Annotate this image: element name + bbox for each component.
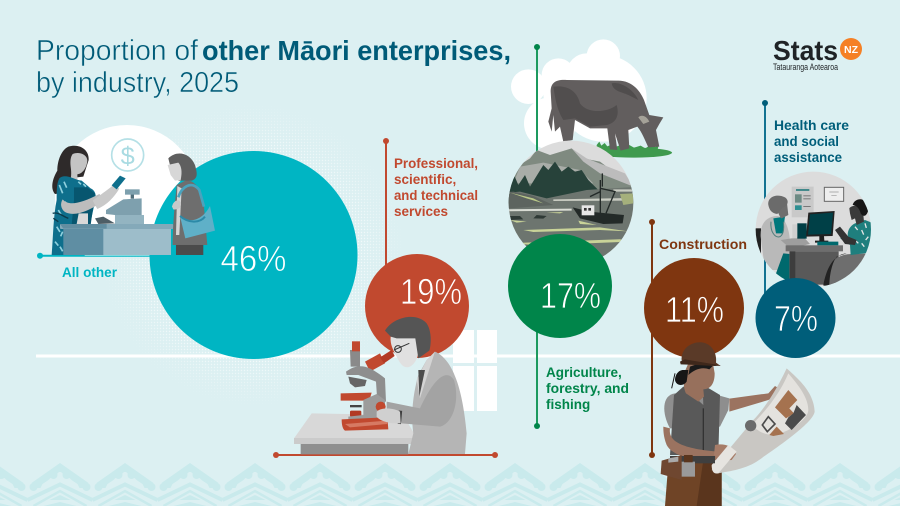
cloud behind cow (511, 39, 647, 149)
title: other Māori enterprises, (202, 35, 511, 66)
illustration: construction worker with plans (661, 342, 815, 506)
label: all other: All other (62, 265, 118, 280)
circle: all other 46% (150, 151, 358, 359)
label: health care and social assistance: Health care (774, 118, 849, 133)
logo: Stats NZ: Tatauranga Aotearoa (773, 62, 838, 72)
circle: all other 46%: 46% (220, 238, 286, 279)
icon: dollar coin (112, 139, 144, 171)
illustration: scientist at microscope (294, 317, 467, 454)
label: agriculture, forestry, and fishing: Agriculture, (546, 365, 622, 380)
circle: health care 7%: 7% (774, 298, 818, 339)
circle: agriculture 17% (508, 234, 612, 338)
illustration: white circle backdrop for shop (55, 125, 185, 256)
label: health care and social assistance: and social (774, 134, 839, 149)
circle: construction 11% (644, 258, 744, 358)
label: agriculture, forestry, and fishing: fishing (546, 397, 590, 412)
label: professional, scientific, and technical services: services (394, 204, 448, 219)
leader line: professional services (273, 138, 498, 458)
label: construction: Construction (659, 237, 747, 252)
label: agriculture, forestry, and fishing (546, 365, 629, 412)
title: by industry, 2025 (36, 67, 239, 99)
label: health care and social assistance (774, 118, 849, 165)
leader line: construction (649, 219, 655, 458)
illustration: shop counter with cashier and customer (52, 139, 215, 255)
illustration: lake, mountains and fishing boat (508, 140, 634, 256)
logo: Stats NZ (773, 35, 862, 72)
label: agriculture, forestry, and fishing: forestry, and (546, 381, 629, 396)
icon: dollar coin: $ (121, 142, 135, 170)
circle: agriculture 17%: 17% (540, 275, 601, 316)
label: professional, scientific, and technical services: scientific, (394, 172, 456, 187)
title: Proportion of (36, 35, 199, 67)
leader line: health care (762, 100, 768, 300)
circle: health care 7% (756, 278, 836, 358)
illustration: doctor and patient at desk (753, 170, 873, 290)
circle: construction 11%: 11% (665, 289, 724, 330)
leader line: all other (37, 253, 160, 259)
label: health care and social assistance: assistance (774, 150, 842, 165)
label: professional, scientific, and technical services (394, 156, 478, 219)
circle: professional services 19% (365, 254, 469, 358)
illustration: cow grazing (548, 80, 672, 158)
title (36, 35, 511, 99)
label: professional, scientific, and technical services: and technical (394, 188, 478, 203)
label: professional, scientific, and technical services: Professional, (394, 156, 478, 171)
logo: Stats NZ: NZ (844, 44, 859, 56)
logo: Stats NZ: Stats (773, 35, 838, 66)
circle: professional services 19%: 19% (400, 271, 462, 312)
window behind scientist (453, 330, 497, 411)
leader line: agriculture (534, 44, 540, 429)
